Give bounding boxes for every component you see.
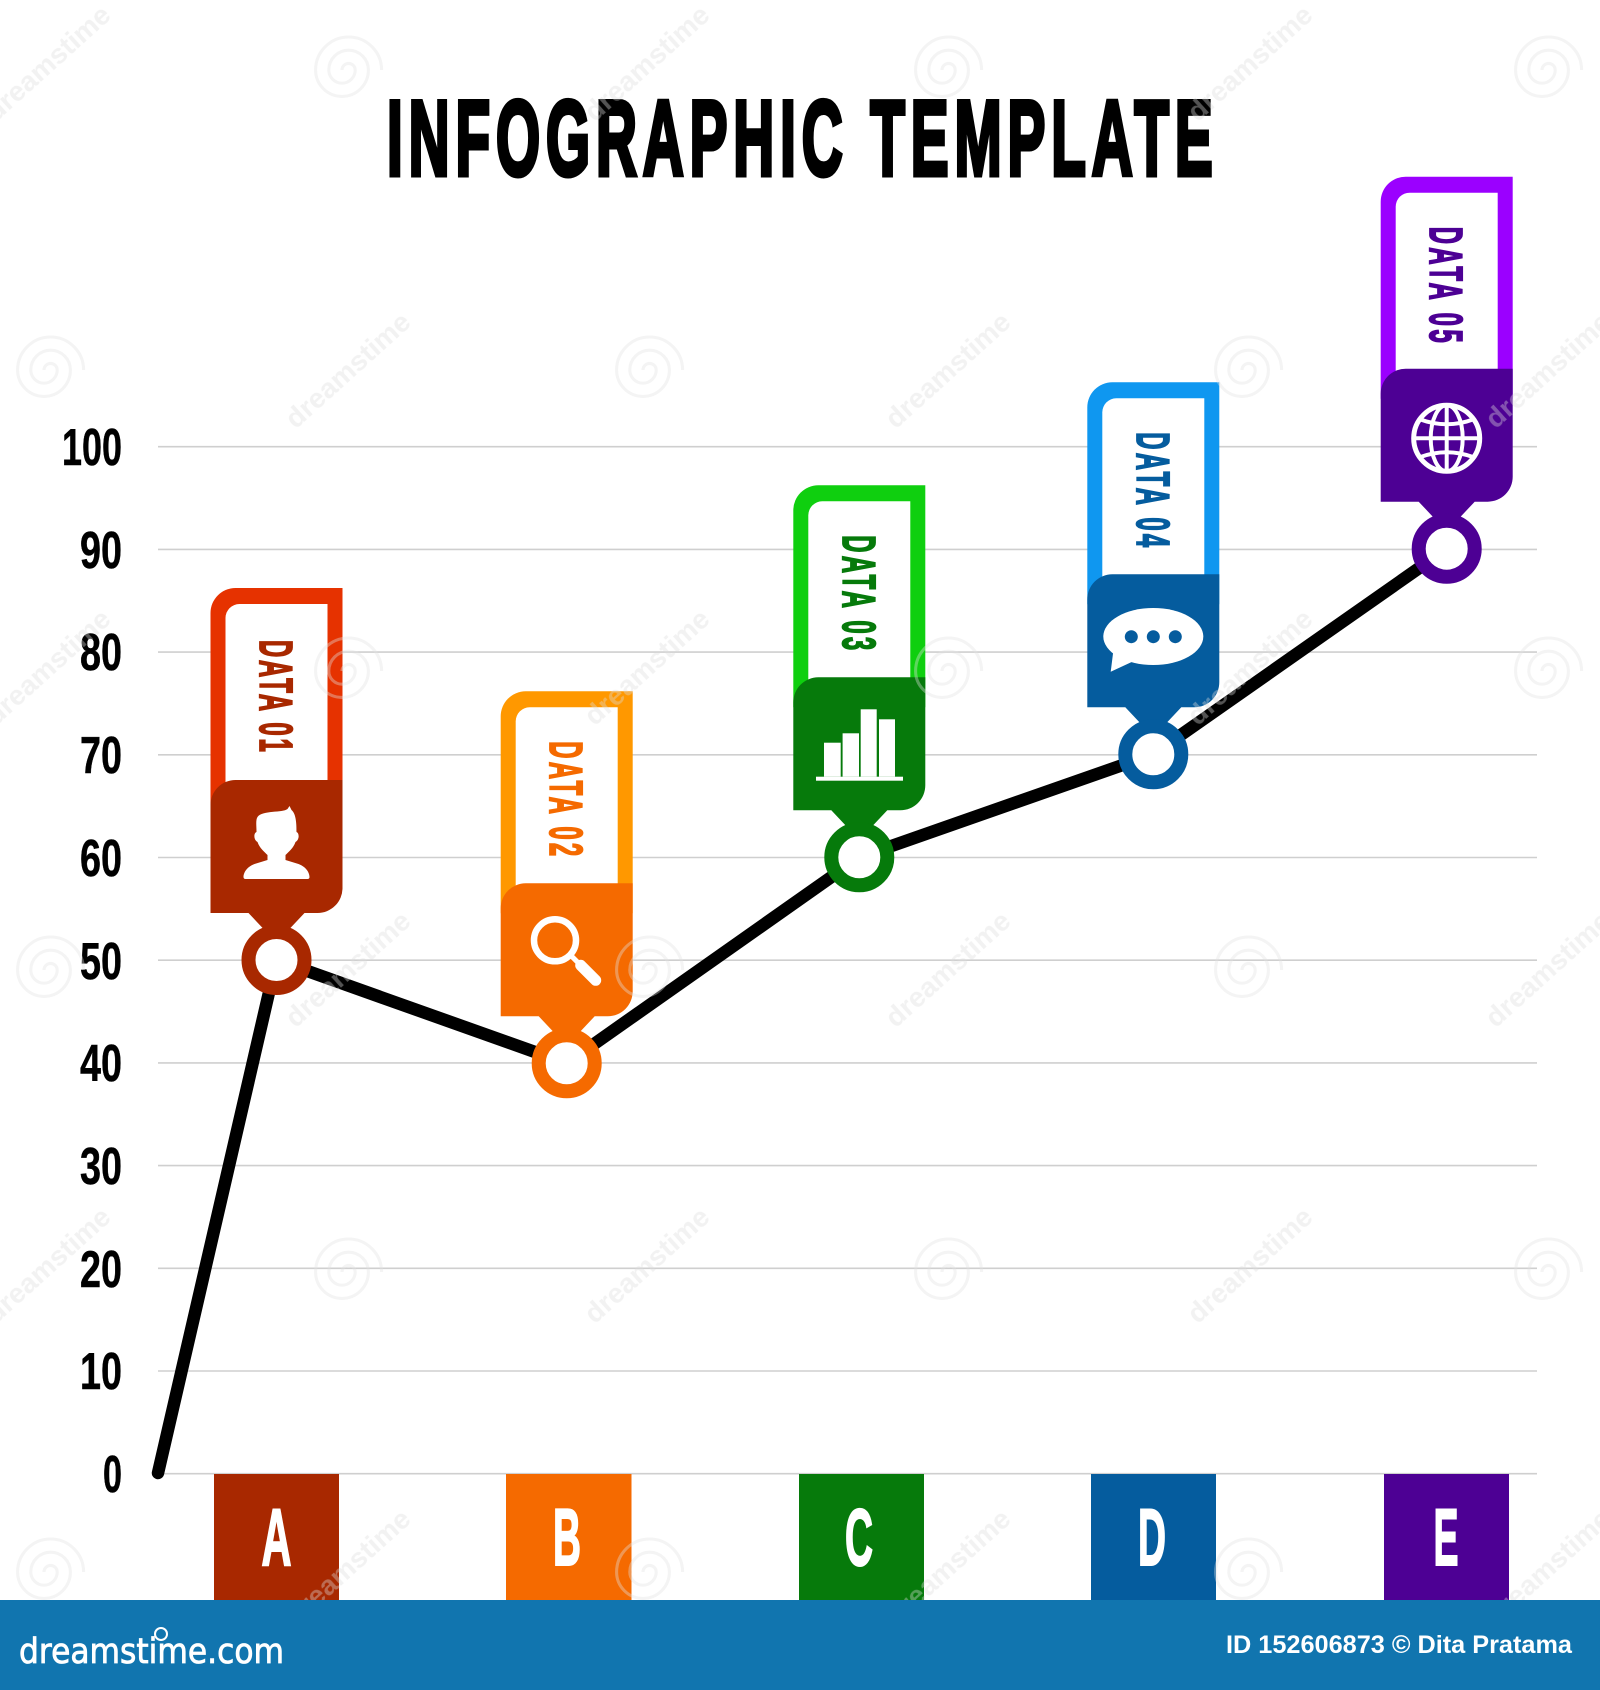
footer logo: dreamstime.com	[19, 1632, 284, 1672]
y axis labels: 30	[80, 1138, 122, 1196]
y axis labels: 90	[80, 522, 122, 580]
label: DATA 03	[833, 535, 884, 650]
y axis labels: 70	[80, 727, 122, 785]
label: DATA 01	[250, 640, 301, 752]
y axis labels	[62, 419, 122, 1504]
watermark: spirals and diagonal text: dreamstime	[1181, 1201, 1318, 1329]
line chart series	[158, 549, 1447, 1473]
watermark: spirals and diagonal text: dreamstime	[879, 905, 1016, 1033]
icon: magnifier	[534, 919, 596, 980]
y axis labels: 20	[80, 1241, 122, 1299]
tag: data 04	[1087, 382, 1219, 782]
icon: globe	[1414, 405, 1480, 471]
category bar A	[214, 1474, 339, 1600]
watermark: spirals and diagonal text: dreamstime	[279, 1503, 416, 1631]
y axis labels: 80	[80, 624, 122, 682]
category bar E: E	[1434, 1493, 1458, 1583]
category bar B: B	[553, 1493, 581, 1583]
watermark: spirals and diagonal text: dreamstime	[879, 1503, 1016, 1631]
category bar B	[506, 1474, 632, 1600]
watermark: spirals and diagonal text: dreamstime	[578, 0, 715, 127]
label: DATA 04	[1127, 432, 1178, 548]
y axis labels: 50	[80, 933, 122, 991]
y axis labels: 0	[103, 1446, 122, 1504]
category bar E	[1384, 1474, 1509, 1600]
watermark: spirals and diagonal text: dreamstime	[1181, 0, 1318, 127]
label: DATA 02	[540, 741, 592, 856]
watermark: spirals and diagonal text: dreamstime	[578, 1201, 715, 1329]
watermark: spirals and diagonal text: dreamstime	[279, 306, 416, 434]
category bar D: D	[1138, 1493, 1166, 1583]
category bar C: C	[845, 1493, 873, 1583]
y axis labels: 60	[80, 830, 122, 888]
label: DATA 05	[1420, 227, 1472, 343]
watermark: spirals and diagonal text: dreamstime	[1181, 603, 1318, 731]
watermark: spirals and diagonal text: dreamstime	[279, 905, 416, 1033]
watermark: spirals and diagonal text: dreamstime	[879, 306, 1016, 434]
tag: data 02	[501, 691, 633, 1091]
icon: bar chart	[816, 709, 903, 781]
category bar C	[799, 1474, 924, 1600]
y axis labels: 40	[80, 1035, 122, 1093]
watermark: spirals and diagonal text: dreamstime	[578, 603, 715, 731]
chart gridlines	[158, 447, 1537, 1474]
y axis labels: 100	[62, 419, 122, 477]
title: INFOGRAPHIC TEMPLATE	[387, 79, 1213, 199]
icon: speech bubble	[1103, 608, 1203, 672]
tag: data 03	[793, 485, 925, 885]
y axis labels: 10	[80, 1343, 122, 1401]
tag: data 01	[210, 588, 342, 988]
icon: person	[244, 806, 310, 879]
category bar D	[1091, 1474, 1216, 1600]
footer credit: ID 152606873 © Dita Pratama	[1226, 1631, 1573, 1659]
footer band	[0, 1600, 1600, 1690]
category bar A: A	[262, 1493, 292, 1583]
tag: data 05	[1381, 177, 1513, 577]
